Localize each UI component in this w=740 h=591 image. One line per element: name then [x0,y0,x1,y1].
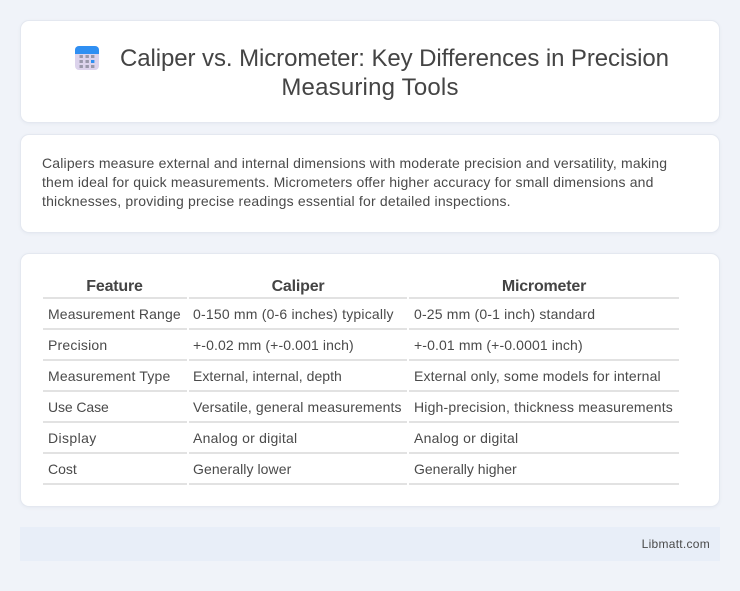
intro text [42,155,667,209]
row: Measurement Type: External only, some models for internal [414,368,661,384]
row: Display: Display [48,430,97,446]
panel: header [20,20,720,123]
row: Use Case [48,399,673,415]
row: Use Case: Versatile, general measurements [193,399,402,415]
row: Measurement Range [48,306,595,322]
row: Measurement Range: 0-150 mm (0-6 inches) typically [193,306,394,322]
title: Caliper vs. Micrometer: Key Differences in Precision [120,45,669,72]
heading: Caliper: Caliper [272,278,324,295]
row: Measurement Type: Measurement Type [48,368,170,384]
intro text: them ideal for quick measurements. Micrometers offer higher accuracy for small dimensions and [42,174,654,190]
intro text: thicknesses, providing precise readings essential for detailed inspections. [42,193,511,209]
row: Display [48,430,518,446]
row: Measurement Type: External, internal, depth [193,368,342,384]
title: Measuring Tools [281,74,459,101]
row: Cost: Cost [48,461,77,477]
row: Measurement Type [48,368,661,384]
footer bar [20,527,720,561]
row: Use Case: Use Case [48,399,109,415]
row: Precision: +-0.02 mm (+-0.001 inch) [193,337,354,353]
heading: Feature: Feature [86,278,143,295]
heading: Micrometer: Micrometer [502,278,586,295]
row: Precision: Precision [48,337,107,353]
row: Cost: Generally lower [193,461,291,477]
table header row [86,278,586,295]
row: Display: Analog or digital [414,430,518,446]
row: Cost [48,461,517,477]
row: Cost: Generally higher [414,461,517,477]
row: Measurement Range: 0-25 mm (0-1 inch) standard [414,306,595,322]
panel: comparison table [20,253,720,507]
row: Measurement Range: Measurement Range [48,306,181,322]
row: Display: Analog or digital [193,430,297,446]
row: Precision: +-0.01 mm (+-0.0001 inch) [414,337,583,353]
title [120,45,669,101]
row: Use Case: High-precision, thickness measurements [414,399,673,415]
intro text: Calipers measure external and internal dimensions with moderate precision and versatility, making [42,155,667,171]
panel: introduction [20,134,720,233]
footer credit: Libmatt.com [642,537,710,551]
icon: calendar grid [75,46,99,70]
row: Precision [48,337,583,353]
